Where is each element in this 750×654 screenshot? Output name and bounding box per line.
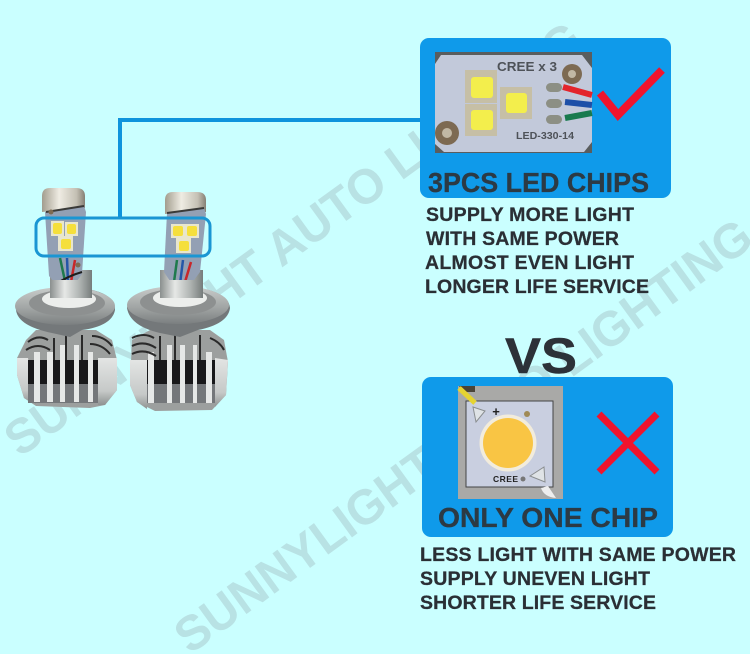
panel: 3 chips xyxy=(420,38,671,198)
left LED bulb xyxy=(15,188,117,408)
LED chips xyxy=(171,224,185,238)
icon: red check mark xyxy=(600,70,662,115)
photo: three-chip board: LED-330-14 xyxy=(516,130,574,142)
bulb stem xyxy=(160,270,203,300)
heatsink xyxy=(17,330,117,408)
text block: 3 chip benefits: SUPPLY MORE LIGHT xyxy=(426,204,634,226)
photo: single chip: CREE xyxy=(493,474,518,484)
text block: 3 chip benefits: ALMOST EVEN LIGHT xyxy=(425,252,634,274)
heading: 3pcs led chips: 3PCS LED CHIPS xyxy=(428,167,649,198)
LED chips xyxy=(51,221,64,236)
photo: three-chip board: CREE x 3 xyxy=(497,60,557,74)
photo: three-chip board xyxy=(435,52,592,153)
bulb tip cap xyxy=(165,192,206,214)
text block: one chip drawbacks xyxy=(420,544,736,614)
icon: red cross xyxy=(599,414,657,472)
text block: 3 chip benefits xyxy=(425,204,649,298)
text block: one chip drawbacks: LESS LIGHT WITH SAME POWER xyxy=(420,544,736,566)
panel: one chip xyxy=(422,377,673,537)
heading: only one chip: ONLY ONE CHIP xyxy=(438,502,658,533)
bulb tip cap xyxy=(42,188,85,212)
bulb stem xyxy=(50,270,92,300)
text block: one chip drawbacks: SUPPLY UNEVEN LIGHT xyxy=(420,568,650,590)
text block: 3 chip benefits: LONGER LIFE SERVICE xyxy=(425,276,649,298)
connector line xyxy=(120,120,420,218)
text block: 3 chip benefits: WITH SAME POWER xyxy=(426,228,619,250)
photo: single chip: + xyxy=(492,404,500,419)
heatsink xyxy=(130,330,228,411)
bulb collar xyxy=(127,286,230,337)
highlight box around chips xyxy=(36,218,210,256)
heading: VS: VS xyxy=(505,328,577,384)
watermark: upper line: SUNNYLIGHT AUTO LIGHTING xyxy=(0,12,593,467)
photo: single chip xyxy=(458,386,563,499)
right LED bulb xyxy=(127,192,230,411)
text block: one chip drawbacks: SHORTER LIFE SERVICE xyxy=(420,592,656,614)
bulb collar xyxy=(16,287,115,337)
